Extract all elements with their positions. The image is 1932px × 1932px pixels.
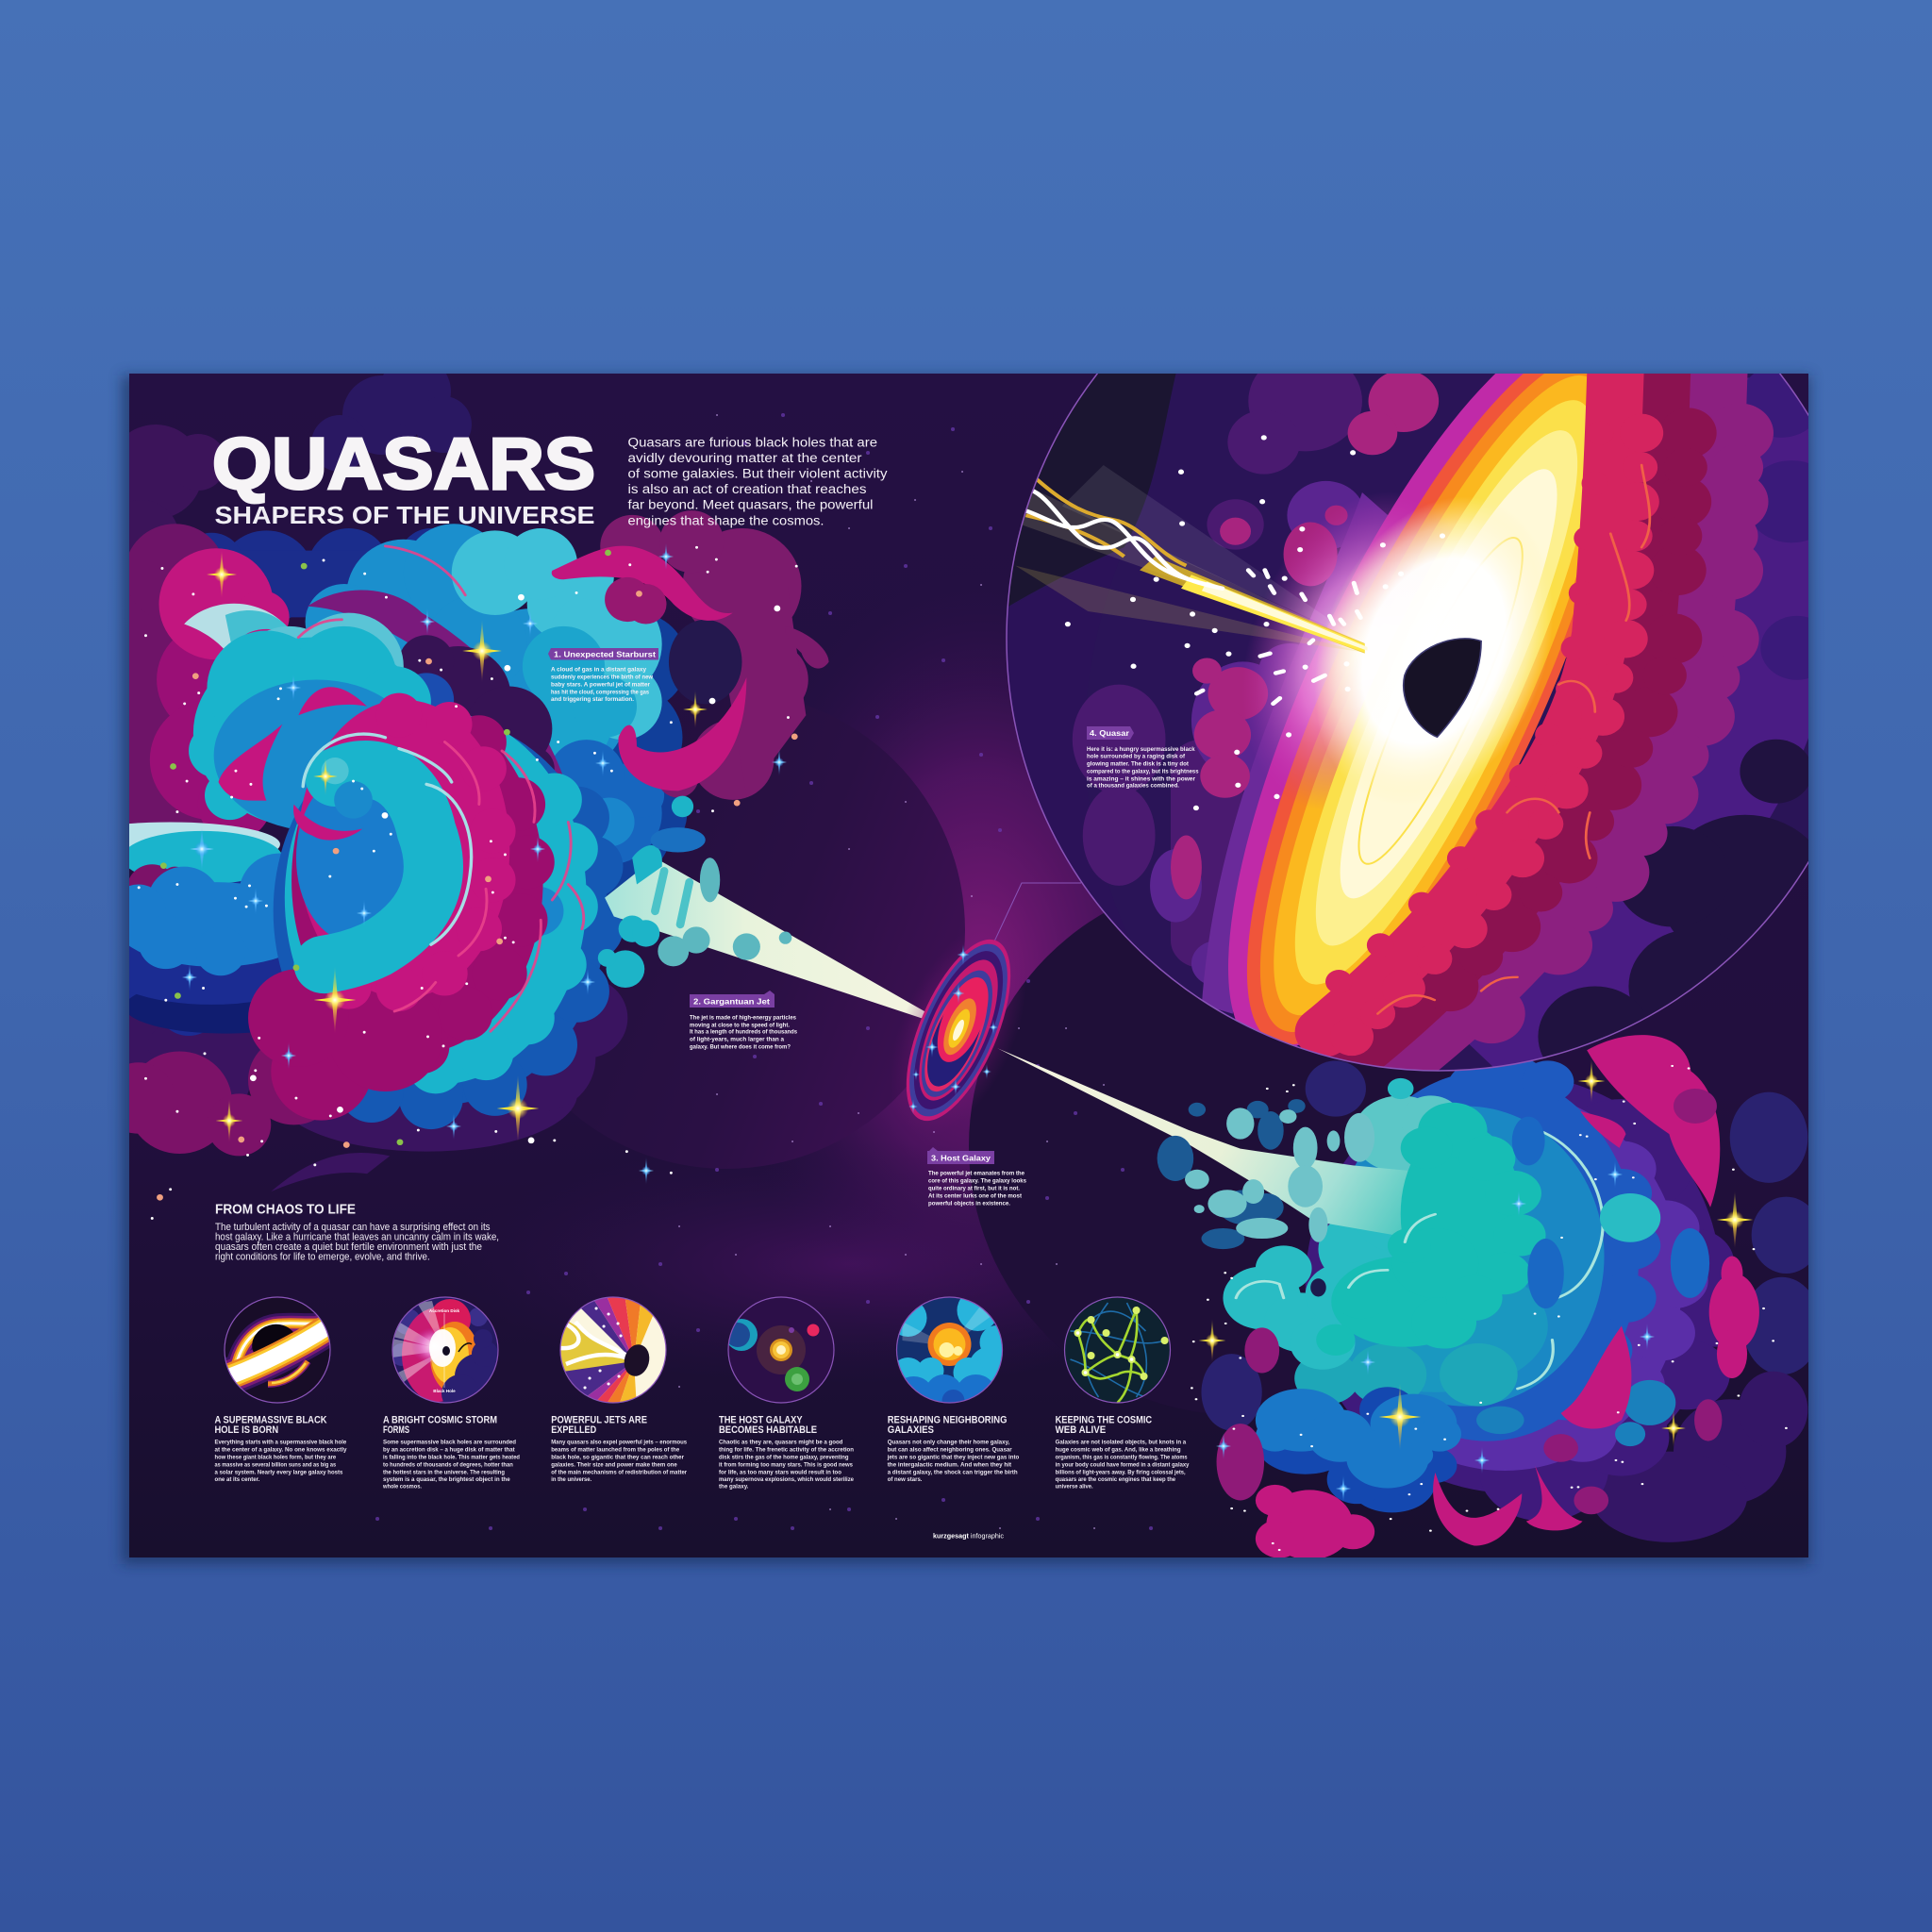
section intro text: host galaxy. Like a hurricane that leaves an uncanny calm in its wake, — [215, 1231, 499, 1242]
teal base — [1353, 1095, 1461, 1173]
column 4 text: it from forming too many stars. This is good news — [719, 1461, 853, 1468]
magenta purple band — [1404, 369, 1696, 1037]
column 4 text: thing for life. The frenetic activity of the accretion — [719, 1446, 854, 1453]
label 3: host galaxy — [927, 1147, 1026, 1207]
central white glow — [1271, 460, 1597, 841]
intro paragraph: of some galaxies. But their violent activity — [628, 466, 888, 481]
label 4: quasar — [1087, 726, 1199, 789]
title: QUASARS — [212, 424, 595, 505]
host galaxy — [862, 904, 1055, 1157]
label 3: host galaxy: quite ordinary at first, but it is not. — [928, 1186, 1020, 1192]
left magenta clusters — [129, 593, 204, 824]
faint background stars — [377, 415, 1151, 1528]
subtitle: SHAPERS OF THE UNIVERSE — [215, 501, 594, 529]
teal splashes around jet — [598, 796, 791, 988]
cloud highlights — [1236, 1214, 1553, 1389]
column 5 text — [887, 1414, 1019, 1483]
dark left zone — [1000, 374, 1175, 611]
intro paragraph: engines that shape the cosmos. — [628, 513, 824, 528]
label 2: gargantuan jet — [690, 991, 797, 1050]
intro paragraph: far beyond. Meet quasars, the powerful — [628, 498, 874, 513]
label 4: quasar: is amazing – it shines with the power — [1087, 775, 1196, 782]
section heading: from chaos to life: FROM CHAOS TO LIFE — [215, 1203, 356, 1218]
jet in close-up — [1015, 438, 1481, 808]
column 6 text: KEEPING THE COSMIC — [1056, 1414, 1152, 1425]
connector line — [988, 883, 1081, 956]
label 2: gargantuan jet: of light-years, much larger than a — [690, 1036, 784, 1042]
center left cloud — [268, 613, 404, 668]
accretion disk — [1154, 281, 1699, 1097]
column 3 text: Many quasars also expel powerful jets – enormous — [551, 1440, 688, 1446]
column 3 text: black hole, so gigantic that they can reach other — [551, 1454, 684, 1460]
outer right purple band — [1471, 378, 1763, 1046]
section intro text: quasars often create a quiet but fertile environment with just the — [215, 1241, 482, 1253]
purple ring — [1306, 1074, 1722, 1493]
column 5 text: the intergalactic medium. And when they hit — [888, 1461, 1012, 1468]
icon: accretion disk: Accretion Disk — [429, 1308, 460, 1313]
label 1: unexpected starburst: 1. Unexpected Starburst — [554, 649, 656, 658]
label 4: quasar: 4. Quasar — [1090, 728, 1130, 738]
label 4: quasar: compared to the galaxy, but its brightness — [1087, 768, 1199, 774]
purple band — [308, 591, 562, 774]
pale crescent upper left — [184, 604, 287, 649]
magenta plumes — [1256, 1035, 1759, 1559]
quasar close-up circle — [1000, 189, 1871, 1097]
label 2: gargantuan jet: 2. Gargantuan Jet — [693, 996, 770, 1006]
upper jet — [605, 862, 924, 1019]
intro paragraph: avidly devouring matter at the center — [628, 451, 862, 466]
column 2 text: is falling into the black hole. This matter gets heated — [383, 1454, 520, 1460]
right cloud dots — [1191, 1066, 1786, 1550]
column 4 text: for life, as too many stars would result in too — [719, 1469, 841, 1475]
sparkle stars — [182, 542, 1753, 1503]
icon: powerful jets — [557, 1293, 666, 1408]
column 5 text: a distant galaxy, the shock can trigger the birth — [888, 1469, 1018, 1475]
column 1 text — [215, 1414, 347, 1483]
label 1: unexpected starburst: and triggering star formation. — [551, 696, 634, 703]
label 3: host galaxy: At its center lurks one of the most — [928, 1192, 1023, 1199]
section intro text: The turbulent activity of a quasar can have a surprising effect on its — [215, 1222, 491, 1233]
intro paragraph: is also an act of creation that reaches — [628, 482, 866, 497]
column 1 text: HOLE IS BORN — [215, 1424, 278, 1436]
icon: accretion disk — [391, 1297, 500, 1412]
dark magenta lower clouds — [129, 1050, 315, 1157]
main ring cyan — [285, 710, 598, 1093]
column 4 text: THE HOST GALAXY — [719, 1414, 803, 1425]
center cyan spiral — [324, 770, 433, 964]
upper cyan mid tone — [306, 524, 619, 750]
column 3 text — [551, 1414, 688, 1483]
central purple band with dark discs — [608, 650, 1104, 1341]
column 3 text: of the main mechanisms of redistribution of matter — [551, 1469, 688, 1475]
column 6 text: huge cosmic web of gas. And, like a breathing — [1056, 1446, 1181, 1453]
column 1 text: A SUPERMASSIVE BLACK — [215, 1414, 327, 1425]
dark lower right — [1538, 740, 1830, 1087]
center blue — [296, 797, 404, 934]
column 2 text: FORMS — [383, 1424, 409, 1436]
label 2: gargantuan jet: The jet is made of high-energy particles — [690, 1015, 796, 1022]
column 4 text — [719, 1414, 854, 1491]
column 1 text: how these giant black holes form, but they are — [215, 1454, 337, 1460]
left flare — [1200, 458, 1517, 843]
column 6 text: Galaxies are not isolated objects, but knots in a — [1056, 1440, 1187, 1446]
label 4: quasar: of a thousand galaxies combined. — [1087, 782, 1179, 789]
main ring navy — [274, 718, 623, 1129]
column 6 text: quasars are the cosmic engines that keep the — [1056, 1476, 1176, 1483]
column 4 text: disk stirs the gas of the home galaxy, preventing — [719, 1454, 849, 1460]
right upper blue — [606, 619, 687, 896]
column 6 text: organism, this gas is constantly flowing. The atoms — [1056, 1454, 1188, 1460]
column 1 text: Everything starts with a supermassive black hole — [215, 1440, 347, 1446]
right magenta tendril — [552, 510, 829, 800]
inner disk — [1246, 372, 1643, 1012]
column 2 text: whole cosmos. — [382, 1484, 422, 1491]
intro paragraph: Quasars are furious black holes that are — [628, 435, 877, 450]
debris dots — [1068, 438, 1442, 808]
column 2 text: to hundreds of thousands of degrees, hotter than — [383, 1461, 513, 1468]
label 1: unexpected starburst: A cloud of gas in a distant galaxy — [551, 666, 646, 673]
label 1: unexpected starburst: suddenly experiences the birth of new — [551, 674, 653, 680]
label 1: unexpected starburst: has hit the cloud, compressing the gas — [551, 689, 649, 695]
column 5 text: GALAXIES — [888, 1424, 934, 1436]
dark magenta ring — [248, 707, 555, 1121]
column 6 text: in your body could have formed in a distant galaxy — [1056, 1461, 1190, 1468]
left clouds — [1073, 351, 1362, 968]
faint background clouds top left — [129, 374, 472, 553]
outer mist clouds — [1201, 1060, 1821, 1430]
top navy — [205, 528, 433, 619]
column 5 text: RESHAPING NEIGHBORING — [888, 1414, 1008, 1425]
icon: supermassive black hole — [219, 1297, 336, 1403]
crimson band — [1324, 364, 1616, 1032]
column 4 text: Chaotic as they are, quasars might be a good — [719, 1440, 842, 1446]
column 6 text: WEB ALIVE — [1056, 1424, 1106, 1436]
bottom blue cloud — [1257, 1387, 1457, 1512]
column 4 text: many supernova explosions, which would sterilize — [719, 1476, 854, 1483]
column 2 text: the hottest stars in the universe. The resulting — [383, 1469, 505, 1475]
column 4 text: BECOMES HABITABLE — [719, 1424, 817, 1436]
pale rim — [1540, 1130, 1603, 1298]
blue lower-left — [129, 853, 281, 975]
label 3: host galaxy: powerful objects in existence. — [928, 1200, 1010, 1207]
left starburst cloud — [129, 510, 924, 1220]
label 3: host galaxy: 3. Host Galaxy — [931, 1153, 991, 1162]
column 1 text: at the center of a galaxy. No one knows exactly — [215, 1446, 347, 1453]
label 4: quasar: hole surrounded by a raging disk of — [1087, 753, 1186, 759]
label 3: host galaxy: The powerful jet emanates from the — [928, 1171, 1024, 1177]
label 1: unexpected starburst: baby stars. A powerful jet of matter — [551, 681, 650, 688]
poster artwork — [129, 374, 1808, 1557]
column 6 text: universe alive. — [1056, 1484, 1093, 1491]
column 5 text: but can also affect neighboring ones. Quasar — [888, 1446, 1012, 1453]
column 5 text: jets are so gigantic that they inject new gas into — [887, 1454, 1019, 1460]
column 5 text: of new stars. — [888, 1476, 923, 1483]
label 2: gargantuan jet: It has a length of hundreds of thousands — [690, 1029, 797, 1036]
dark crimson band — [1352, 369, 1644, 1037]
icon: accretion disk: Black Hole — [433, 1389, 456, 1393]
column 2 text — [382, 1414, 520, 1491]
splash blobs — [1158, 1099, 1306, 1249]
galaxy sparkles — [908, 943, 998, 1115]
label 2: gargantuan jet: galaxy. But where does it come from? — [690, 1043, 791, 1050]
black hole — [1404, 639, 1481, 737]
column 2 text: system is a quasar, the brightest object in the — [383, 1476, 510, 1483]
ring highlights — [298, 546, 584, 1031]
blue layer — [1336, 1054, 1660, 1441]
icon: habitable galaxy — [725, 1297, 834, 1403]
blue accents — [1512, 1117, 1709, 1308]
section intro text: right conditions for life to emerge, evolve, and thrive. — [215, 1251, 430, 1262]
column 1 text: as massive as several billion suns and as big as — [215, 1461, 336, 1468]
column 3 text: beams of matter launched from the poles of the — [551, 1446, 680, 1453]
poster background — [129, 374, 1808, 1557]
label 4: quasar: Here it is: a hungry supermassive black — [1087, 746, 1195, 753]
left cloud dots — [139, 547, 796, 1218]
bright magenta ring — [297, 693, 516, 1011]
column 3 text: galaxies. Their size and power make them one — [551, 1461, 677, 1468]
column 3 text: POWERFUL JETS ARE — [551, 1414, 647, 1425]
right impact cloud — [997, 1035, 1821, 1559]
small magenta crescents — [219, 687, 367, 841]
circle background — [1000, 189, 1849, 1094]
label 2: gargantuan jet: moving at close to the speed of light. — [690, 1022, 790, 1028]
back purple clouds — [129, 985, 628, 1191]
lower jet — [997, 1048, 1435, 1242]
column 1 text: a solar system. Nearly every large galaxy hosts — [215, 1469, 343, 1475]
section intro text — [215, 1222, 499, 1262]
column 3 text: in the universe. — [551, 1476, 591, 1483]
cloud accent lines — [1377, 465, 1650, 1014]
icon: reshaping galaxies — [889, 1290, 1013, 1418]
front teal clouds — [1316, 1103, 1546, 1356]
blue lower right of upper cloud — [548, 740, 664, 864]
column 2 text: Some supermassive black holes are surrounded — [383, 1440, 516, 1446]
column 1 text: one at its center. — [215, 1476, 260, 1483]
footer credit: kurzgesagt infographic — [933, 1531, 1004, 1540]
column 2 text: A BRIGHT COSMIC STORM — [383, 1414, 497, 1425]
label 1: unexpected starburst — [548, 648, 658, 703]
upper cyan light — [452, 528, 662, 740]
label 4: quasar: glowing matter. The disk is a tiny dot — [1087, 760, 1190, 767]
label 3: host galaxy: core of this galaxy. The galaxy looks — [928, 1178, 1026, 1185]
column 4 text: the galaxy. — [719, 1484, 749, 1491]
icon: cosmic web — [1064, 1297, 1170, 1403]
column 5 text: Quasars not only change their home galaxy, — [888, 1440, 1010, 1446]
poster shadow — [122, 375, 1810, 1564]
pale strip left — [129, 823, 280, 849]
column 6 text: billions of light-years away. By firing colossal jets, — [1056, 1469, 1186, 1475]
column 6 text — [1056, 1414, 1190, 1491]
intro paragraph — [628, 435, 888, 528]
navy lower left — [230, 881, 242, 883]
column 3 text: EXPELLED — [551, 1424, 596, 1436]
column 2 text: by an accretion disk – a huge disk of matter that — [383, 1446, 516, 1453]
circle outline — [1007, 207, 1871, 1071]
